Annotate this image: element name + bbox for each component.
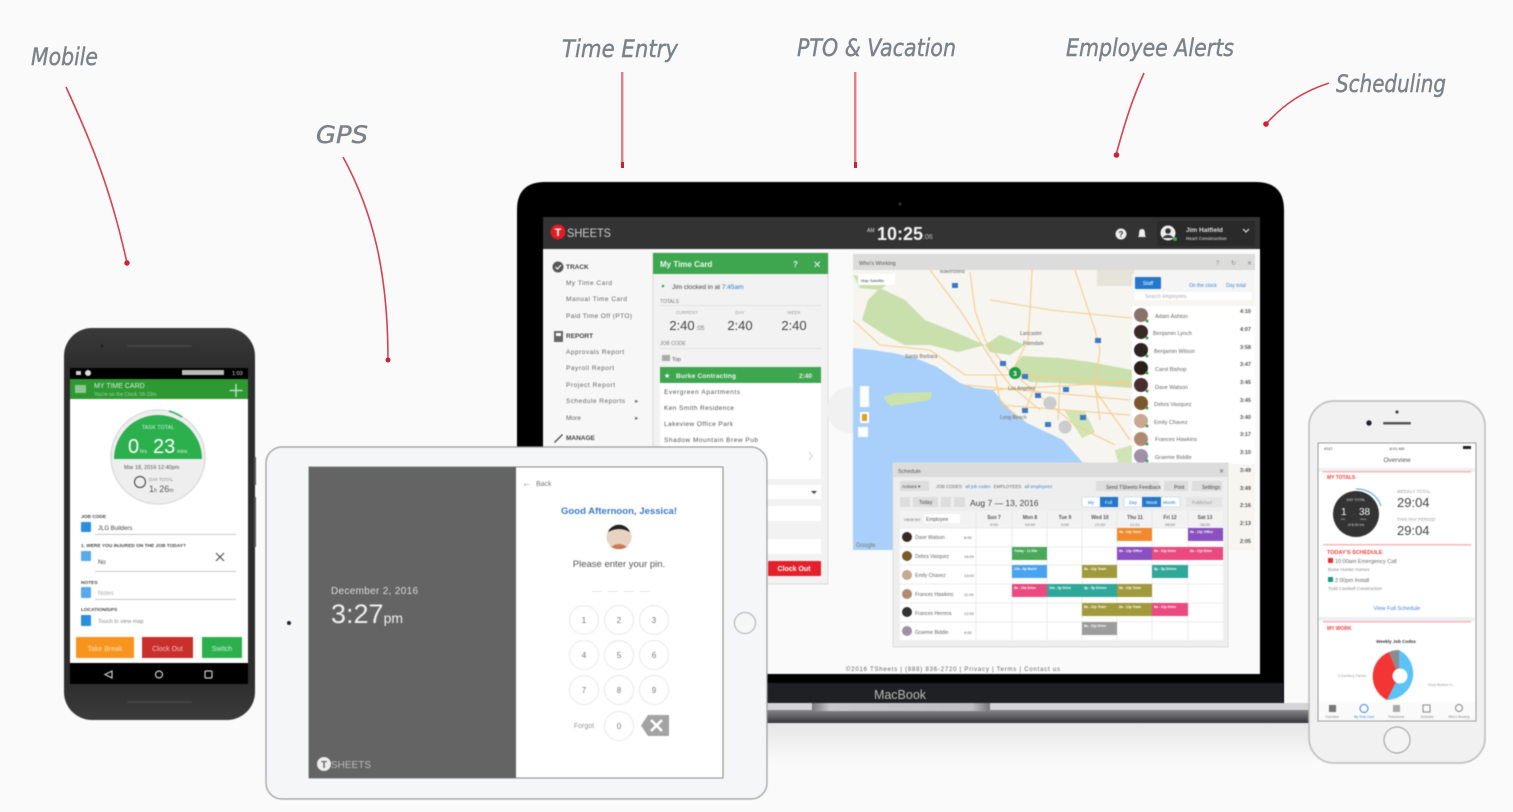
- kiosk clock panel: 3:27pm: [331, 599, 403, 629]
- phone buttons: Take Break: [87, 646, 123, 653]
- keypad: 9: [652, 686, 657, 695]
- panel: Schedule: Published: [1192, 500, 1212, 505]
- iPhone speaker and camera: [1366, 410, 1411, 426]
- keypad: 0: [617, 722, 622, 731]
- app header bar: [543, 217, 1260, 249]
- iPhone tab bar: My Time Card: [1354, 715, 1374, 719]
- device: Android phone: [64, 328, 256, 720]
- schedule shifts: 10a - 6p Burnt: [1014, 567, 1037, 571]
- schedule shifts: 8a - 12p Drive: [1190, 549, 1212, 553]
- panel: Who's Working map: [853, 254, 1255, 550]
- arrow: Scheduling leader: [1263, 83, 1329, 127]
- button: Clock Out: [768, 561, 821, 576]
- kiosk PIN panel: Good Afternoon, Jessica!: [561, 506, 677, 517]
- schedule grid: Dave Watson: [915, 535, 945, 541]
- arrow: Employee Alerts leader: [1114, 73, 1144, 158]
- panel: Schedule: Print: [1174, 485, 1185, 491]
- keypad: Forgot: [574, 723, 594, 730]
- employee list: Search employees: [1145, 294, 1187, 300]
- schedule grid: Mon 8: [1023, 515, 1037, 521]
- keypad: 6: [652, 651, 657, 660]
- label: PTO and Vacation: PTO & Vacation: [797, 34, 956, 62]
- schedule shifts: 8p - 5p Driven: [1154, 567, 1176, 571]
- app header bar: SHEETS: [567, 226, 611, 240]
- iPhone tab bar: [1319, 702, 1475, 720]
- iPhone screen: 8:01 AM: [1390, 446, 1404, 451]
- Today's Schedule: Todd Cambell Construction: [1328, 586, 1383, 591]
- form fields: 1. WERE YOU INJURED ON THE JOB TODAY?: [81, 543, 186, 549]
- sidebar navigation: Payroll Report: [566, 365, 614, 372]
- employee list: Debra Vasquez: [1154, 402, 1192, 408]
- schedule grid: Graeme Biddle: [915, 630, 949, 636]
- app header bar: 10:25: [877, 224, 923, 244]
- app header bar: Heart Construction: [1186, 236, 1227, 241]
- schedule grid: 0:00: [990, 522, 999, 527]
- Today's Schedule: Boise Hunter Homes: [1328, 567, 1370, 572]
- schedule grid: 13:00: [964, 573, 975, 578]
- schedule shifts: 8a - 10a Drive: [1014, 586, 1036, 590]
- schedule shifts: 8a - 12p Team: [1119, 605, 1141, 609]
- panel: Schedule: Full: [1105, 500, 1112, 505]
- employee list: Emily Chavez: [1154, 420, 1188, 426]
- iPhone screen: Overview: [1383, 457, 1411, 464]
- panel: Who's Working map: ✕: [1247, 261, 1252, 267]
- panel: Who's Working map: ?: [1216, 261, 1220, 267]
- laptop screen: [543, 217, 1260, 674]
- app header bar: ?: [1119, 230, 1124, 239]
- keypad: [570, 606, 669, 740]
- schedule grid: 4:00: [964, 630, 973, 635]
- status bar: 1:03: [232, 371, 243, 377]
- panel: Who's Working map: 3:49: [1240, 468, 1251, 474]
- schedule grid: 08:00: [1200, 522, 1211, 527]
- employee list: 4:07: [1240, 327, 1251, 333]
- sidebar navigation: My Time Card: [566, 280, 612, 287]
- panel: My Time Card: DAY: [736, 310, 744, 315]
- employee list: 3:40: [1240, 415, 1251, 421]
- schedule grid: Emily Chavez: [915, 573, 946, 579]
- schedule grid: 04:00: [1025, 522, 1036, 527]
- panel: My Time Card: ★: [664, 372, 670, 380]
- panel: Schedule: My: [1088, 500, 1095, 505]
- map: Santa Barbara: [905, 354, 937, 360]
- avatar: [606, 524, 632, 550]
- panel: Who's Working map: 2:13: [1240, 521, 1251, 527]
- form fields: JOB CODE: [81, 514, 107, 520]
- map: Bakersfield: [940, 269, 965, 275]
- app header bar: :06: [923, 234, 933, 241]
- My Totals: WEEKLY TOTAL: [1397, 489, 1431, 494]
- form fields: Touch to view map: [98, 619, 144, 625]
- panel: Schedule: Actions ▾: [902, 484, 921, 489]
- schedule grid: 21:00: [1095, 522, 1106, 527]
- employee list: [1132, 274, 1255, 464]
- laptop lid: [517, 182, 1284, 703]
- MacBook wordmark: MacBook: [874, 688, 927, 702]
- kiosk clock panel: December 2, 2016: [331, 586, 418, 597]
- panel: Who's Working map: 3:49: [1240, 486, 1251, 492]
- iPhone home button: [1384, 727, 1410, 753]
- panel: My Time Card: Top: [672, 357, 681, 363]
- schedule grid: VIEW BY: [904, 517, 921, 522]
- button: Clock Out: Clock Out: [777, 566, 811, 573]
- keypad: 4: [582, 651, 587, 660]
- map: Palmdale: [1023, 341, 1044, 347]
- iPhone tab bar: Overview: [1325, 715, 1339, 719]
- employee list: 3:58: [1240, 345, 1251, 351]
- panel: My Time Card: 2:40: [669, 318, 695, 333]
- laptop base: [700, 703, 1340, 710]
- schedule grid: Frances Hawkins: [915, 592, 954, 598]
- employee list: Dave Watson: [1155, 385, 1188, 391]
- My Totals: MY TOTALS: [1327, 475, 1356, 481]
- map: Los Angeles: [1008, 386, 1036, 392]
- time dial: mins: [177, 449, 188, 455]
- time dial: 23: [153, 436, 175, 458]
- schedule grid: [900, 511, 1223, 640]
- employee list: 3:10: [1240, 450, 1251, 456]
- My Totals: [1323, 471, 1471, 538]
- sidebar navigation: Approvals Report: [566, 349, 624, 356]
- kiosk PIN panel: ←: [522, 478, 531, 488]
- Today's Schedule: View Full Schedule: [1374, 606, 1420, 612]
- app header bar: T: [555, 227, 562, 239]
- time dial: [111, 410, 205, 504]
- panel: My Time Card: ✕: [813, 260, 821, 271]
- app header bar: AM: [867, 228, 874, 234]
- employee list: Benjamin Lynch: [1153, 331, 1192, 337]
- My Work pie chart: MY WORK: [1327, 626, 1352, 632]
- label: Scheduling: Scheduling: [1336, 70, 1446, 98]
- map: Long Beach: [1000, 415, 1027, 421]
- screen footer: ©2016 TSheets | (888) 836-2720 | Privacy | Terms | Contact us: [846, 666, 1060, 673]
- schedule shifts: 8a - 12p Drive: [1154, 549, 1176, 553]
- sidebar navigation: TRACK: [566, 264, 589, 271]
- schedule shifts: 9a - 12p Team: [1119, 530, 1141, 534]
- panel: Who's Working map: ↻: [1231, 260, 1236, 267]
- sidebar navigation: More: [566, 415, 581, 422]
- panel: Schedule: Month: [1163, 500, 1176, 505]
- My Totals: of 8:00 hrs: [1348, 523, 1365, 527]
- phone app header: MY TIME CARD: [94, 383, 145, 390]
- employee list: 3:45: [1240, 380, 1251, 386]
- schedule shifts: 8a - 12p Drive: [1154, 605, 1176, 609]
- phone buttons: [76, 637, 242, 658]
- keypad: 8: [617, 686, 622, 695]
- sidebar navigation: Paid Time Off (PTO): [566, 313, 632, 320]
- schedule shifts: 8a - 12p Team: [1084, 567, 1106, 571]
- schedule grid: 0:00: [1061, 522, 1070, 527]
- phone buttons: Switch: [212, 646, 232, 653]
- sidebar navigation: REPORT: [566, 333, 593, 340]
- sidebar navigation: MANAGE: [566, 435, 596, 442]
- time dial: Mar 18, 2016 12:40pm: [124, 465, 180, 471]
- employee list: Benjamin Wilson: [1154, 349, 1195, 355]
- panel: My Time Card: 2:40: [799, 373, 812, 380]
- schedule shifts: [1012, 528, 1223, 635]
- form fields: NOTES: [81, 580, 98, 586]
- kiosk clock panel: T: [321, 760, 327, 771]
- label: Time Entry: Time Entry: [562, 35, 679, 63]
- keypad: 2: [617, 616, 622, 625]
- time dial: DAY TOTAL: [149, 477, 174, 482]
- panel: My Time Card: 2:40: [781, 318, 807, 333]
- schedule shifts: Today - 11:00a: [1014, 549, 1037, 553]
- My Work pie chart: Weekly Job Codes: [1376, 639, 1416, 644]
- loading spinner watermark: [827, 387, 873, 433]
- sidebar navigation: Manual Time Card: [566, 296, 627, 303]
- keypad: 1: [582, 616, 587, 625]
- schedule grid: 21:01: [1130, 522, 1141, 527]
- panel: Schedule: Aug 7 — 13, 2016: [970, 498, 1039, 508]
- sidebar navigation: Project Report: [566, 382, 615, 389]
- phone nav bar: [105, 671, 212, 678]
- panel: Who's Working map: 2:05: [1240, 539, 1251, 545]
- iPhone tab bar: Timesheets: [1388, 715, 1405, 719]
- My Totals: 29:04: [1397, 523, 1430, 538]
- panel: Schedule: Schedule: [898, 469, 921, 475]
- iPhone screen: AT&T: [1324, 447, 1334, 451]
- keypad: 3: [652, 616, 657, 625]
- My Totals: 38: [1359, 507, 1371, 518]
- employee list: Day total: [1226, 283, 1246, 289]
- label: Employee Alerts: Employee Alerts: [1066, 34, 1234, 62]
- kiosk clock panel: [309, 467, 516, 778]
- panel: Schedule: Send TSheets Feedback: [1106, 485, 1161, 491]
- sidebar navigation: ▸: [635, 415, 639, 422]
- schedule shifts: 8a - 12p Team: [1119, 586, 1141, 590]
- panel: My Time Card: JOB CODE: [660, 341, 686, 347]
- iPad screen: [309, 467, 723, 778]
- panel: Who's Working map: 2:16: [1240, 503, 1251, 509]
- Today's Schedule: TODAY'S SCHEDULE: [1327, 550, 1383, 556]
- phone screen: [70, 368, 248, 684]
- employee list: On the clock: [1189, 283, 1217, 289]
- schedule shifts: 10a - 3p Drive: [1049, 586, 1071, 590]
- Today's Schedule: 2:00pm Install: [1335, 578, 1369, 584]
- panel: My Time Card: My Time Card: [660, 260, 712, 269]
- sidebar navigation: [543, 249, 653, 449]
- iPad home button: [734, 612, 756, 634]
- panel: My Time Card: [653, 253, 828, 584]
- app header bar: Jim Hatfield: [1186, 227, 1223, 234]
- schedule grid: 16:00: [964, 554, 975, 559]
- arrow: GPS leader: [343, 157, 390, 362]
- map: Map Satellite: [861, 278, 885, 283]
- schedule grid: Fri 12: [1163, 515, 1177, 521]
- Today's Schedule: [1323, 544, 1471, 612]
- form fields: [81, 514, 236, 626]
- employee list: Adam Ashton: [1155, 314, 1188, 320]
- kiosk PIN panel: Please enter your pin.: [573, 559, 665, 570]
- label: GPS: GPS: [316, 121, 368, 149]
- iPad camera: [287, 621, 291, 625]
- form fields: Notes: [98, 591, 114, 597]
- time dial: 0: [128, 436, 139, 458]
- label: Mobile: Mobile: [31, 43, 98, 71]
- map: Lancaster: [1020, 331, 1042, 337]
- schedule grid: Frances Herrera: [915, 611, 952, 617]
- kiosk clock panel: SHEETS: [331, 760, 371, 771]
- keypad: 5: [617, 651, 622, 660]
- phone buttons: Clock Out: [152, 646, 183, 653]
- panel: My Time Card: Shadow Mountain Brew Pub: [664, 437, 758, 444]
- schedule grid: 08:00: [1165, 522, 1176, 527]
- iPhone screen: [1318, 443, 1476, 721]
- schedule grid: 12:00: [964, 611, 975, 616]
- panel: My Time Card: 2:40: [727, 318, 753, 333]
- employee list: 3:17: [1240, 432, 1251, 438]
- My Totals: hrs: [1341, 517, 1346, 521]
- My Work pie chart: 5 Century Farms: [1338, 674, 1366, 678]
- panel: Schedule: Day: [1129, 500, 1138, 505]
- schedule shifts: 8a - 12p Office: [1190, 530, 1213, 534]
- My Totals: THIS PAY PERIOD: [1397, 517, 1436, 522]
- keypad: 7: [582, 686, 587, 695]
- kiosk PIN panel: [522, 478, 677, 740]
- schedule grid: Employee: [926, 517, 948, 523]
- schedule shifts: 8a - 12p Drive: [1084, 624, 1106, 628]
- My Totals: 29:04: [1397, 495, 1430, 510]
- employee list: Carol Bishop: [1155, 367, 1186, 373]
- map: [853, 269, 1134, 550]
- My Work pie chart: Dory Burton H...: [1428, 683, 1455, 687]
- schedule shifts: 8a - 12p Team: [1084, 605, 1106, 609]
- panel: My Time Card: WEEK: [787, 310, 801, 315]
- kiosk PIN panel: Back: [536, 481, 552, 488]
- time dial: TASK TOTAL: [142, 425, 174, 431]
- schedule shifts: 8a - 12p Office: [1119, 549, 1142, 553]
- panel: Schedule: Settings: [1202, 485, 1221, 491]
- My Totals: DAY TOTAL: [1347, 498, 1365, 502]
- phone app header: [70, 379, 248, 399]
- panel: My Time Card: Evergreen Apartments: [664, 389, 741, 396]
- employee list: Frances Hawkins: [1155, 437, 1197, 443]
- time dial: hrs: [140, 449, 147, 455]
- schedule grid: Sat 13: [1198, 515, 1213, 521]
- My Totals: mins: [1360, 517, 1367, 521]
- schedule grid: Tue 9: [1059, 515, 1072, 521]
- arrow: PTO leader: [854, 72, 857, 168]
- employee list: Graeme Biddle: [1155, 455, 1192, 461]
- form fields: JLG Builders: [98, 526, 132, 532]
- time dial: 1h 26m: [149, 484, 173, 494]
- employee list: 3:45: [1240, 398, 1251, 404]
- arrow: Time Entry leader: [621, 72, 624, 168]
- map: 3: [1013, 371, 1017, 378]
- device: laptop: [517, 182, 1340, 763]
- My Work pie chart: [1323, 621, 1471, 700]
- schedule grid: 8:00: [964, 535, 973, 540]
- panel: Schedule: ✕: [1219, 469, 1224, 475]
- schedule grid: 11:00: [964, 592, 974, 597]
- iPhone tab bar: Schedule: [1420, 715, 1434, 719]
- panel: My Time Card: Ken Smith Residence: [664, 405, 734, 412]
- sidebar navigation: ▸: [635, 398, 639, 405]
- panel: My Time Card: CURRENT: [676, 310, 698, 315]
- sidebar navigation: Schedule Reports: [566, 398, 626, 405]
- schedule grid: Thu 11: [1127, 515, 1143, 521]
- schedule grid: Wed 10: [1091, 515, 1109, 521]
- panel: My Time Card: Burke Contracting: [676, 373, 736, 380]
- panel: Who's Working map: Who's Working: [859, 261, 896, 267]
- status bar: [76, 370, 243, 377]
- form fields: No: [98, 560, 106, 566]
- schedule shifts: 3p - 5p Driven: [1084, 586, 1106, 590]
- panel: Schedule: Week: [1146, 500, 1158, 505]
- panel: My Time Card: ?: [793, 260, 798, 269]
- panel: Schedule: JOB CODES all job codes EMPLOYEES all employees: [936, 484, 1053, 489]
- device: iPhone: [1309, 401, 1485, 763]
- schedule grid: Debra Vasquez: [915, 554, 950, 560]
- arrow: Mobile leader: [66, 87, 130, 266]
- Today's Schedule: 10:00am Emergency Call: [1335, 559, 1397, 565]
- panel: My Time Card: Jim clocked in at 7:45am: [672, 284, 744, 291]
- My Totals: 1: [1341, 507, 1347, 518]
- panel: Schedule: [893, 463, 1228, 647]
- panel: My Time Card: Lakeview Office Park: [664, 421, 734, 428]
- employee list: 4:10: [1240, 309, 1251, 315]
- phone app header: You're on the Clock: 0h 23m: [94, 392, 156, 398]
- panel: My Time Card: :05: [696, 326, 705, 332]
- form fields: LOCATION/GPS: [81, 607, 118, 613]
- schedule grid: Sun 7: [987, 515, 1001, 521]
- panel: My Time Card: TOTALS: [660, 299, 680, 305]
- iPhone tab bar: Who's Working: [1448, 715, 1470, 719]
- map: Google: [856, 543, 876, 549]
- panel: Schedule: Today: [919, 500, 933, 506]
- device: iPad: [266, 447, 767, 799]
- employee list: Staff: [1143, 281, 1154, 287]
- employee list: 3:47: [1240, 362, 1251, 368]
